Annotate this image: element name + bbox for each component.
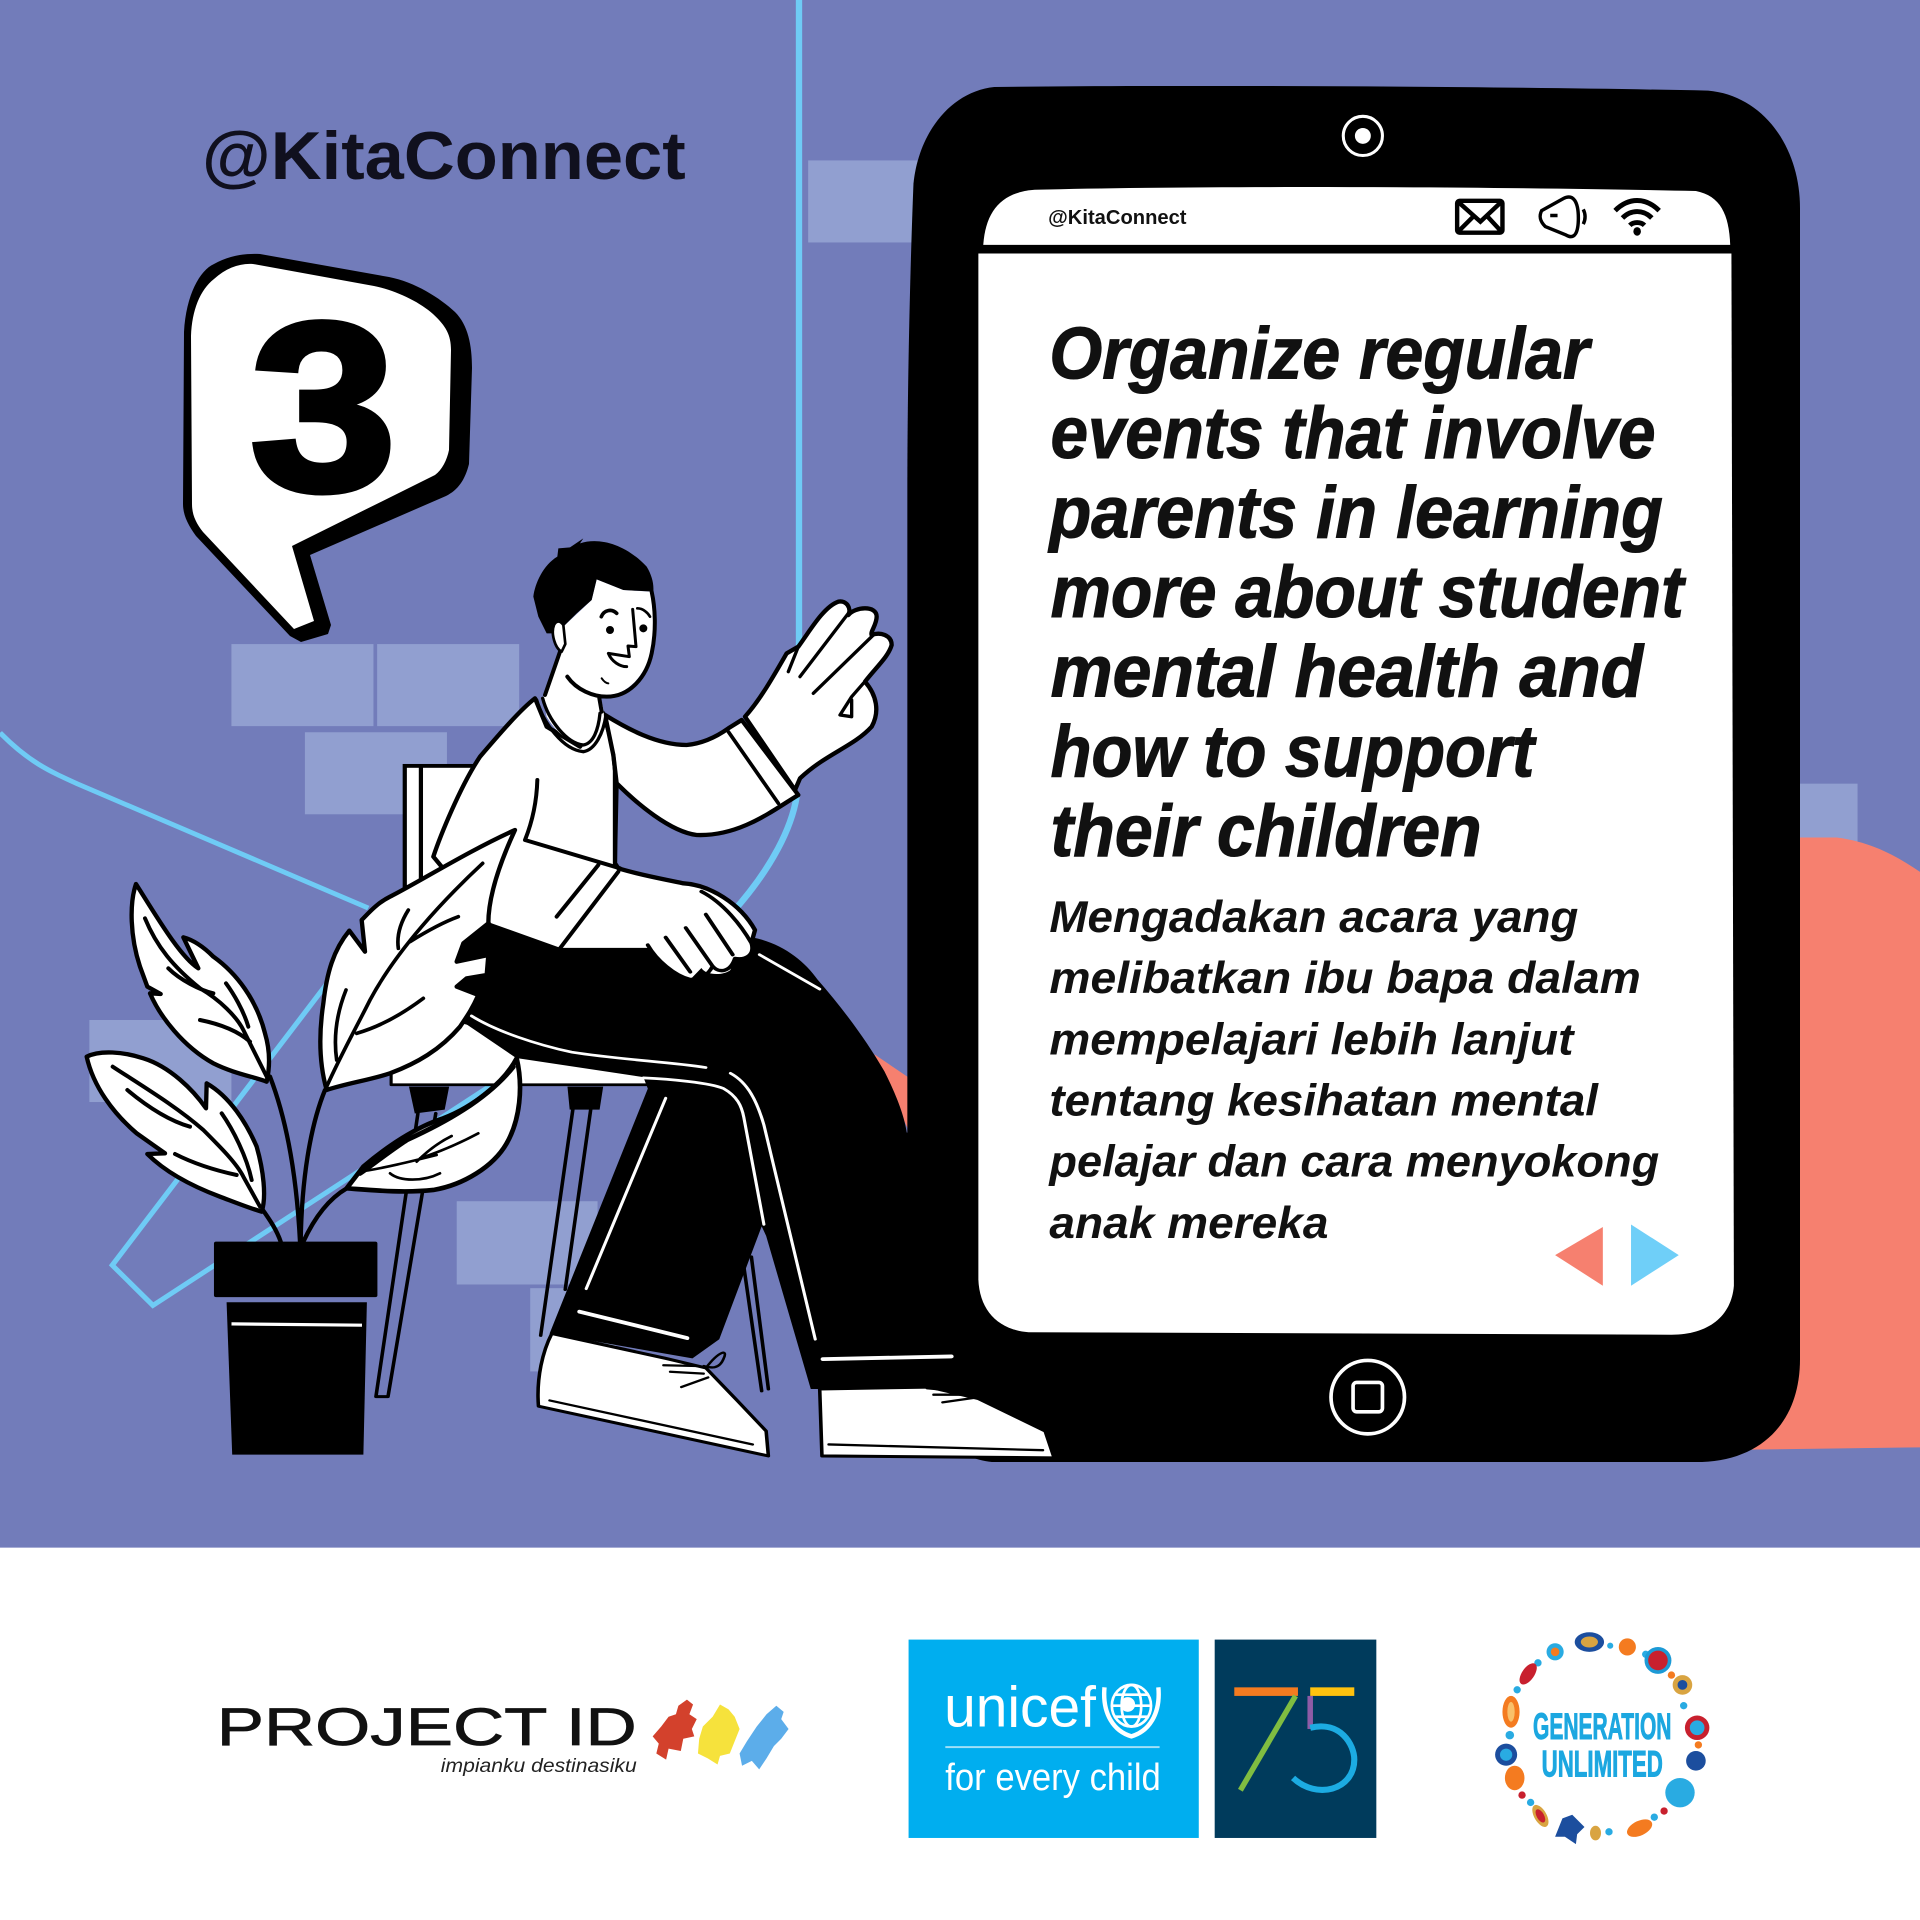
red brush stroke (653, 1700, 697, 1760)
chair seat (391, 1018, 657, 1085)
sweater collar (537, 698, 606, 752)
Unlimited wordmark: UNLIMITED (1542, 1744, 1663, 1785)
yellow brush stroke (698, 1704, 740, 1764)
icon: speaker (1540, 197, 1585, 237)
logo: Project ID (217, 1698, 789, 1777)
white footer panel (0, 1548, 1920, 1920)
man's raised arm (605, 715, 798, 835)
light blue line path (0, 733, 491, 1305)
bottom left leaf veins (113, 1067, 260, 1207)
chair feet (409, 1087, 603, 1113)
right leaf veins (360, 1067, 513, 1173)
5 stem (1308, 1696, 1312, 1729)
left shoe details (550, 1353, 753, 1444)
torso and sleeve lines (525, 755, 620, 948)
home button (1331, 1360, 1404, 1434)
7 stroke (1240, 1696, 1296, 1790)
text block: Malay translation (1048, 893, 1659, 1248)
heading: English message (1048, 311, 1686, 872)
arrow: next (1631, 1224, 1679, 1286)
large centre leaf (320, 830, 515, 1090)
bubble shadow (183, 254, 472, 642)
heading: English message: their children (1051, 789, 1482, 872)
heading: English message: how to support (1051, 709, 1537, 792)
illustration: chair back (405, 766, 482, 887)
tablet screen (978, 253, 1734, 1335)
man's right shoe (820, 1387, 1054, 1458)
logo: Generation Unlimited (1495, 1632, 1709, 1844)
bubble face (191, 264, 451, 629)
75 yellow bar (1310, 1687, 1354, 1696)
UNICEF wordmark: unicef (944, 1676, 1097, 1740)
jaw and neck lines (545, 592, 655, 712)
camera (1343, 116, 1382, 156)
man's hair (533, 538, 653, 633)
text block: Malay translation: pelajar dan cara menyokong (1048, 1138, 1659, 1187)
UNICEF tagline: for every child (945, 1757, 1161, 1799)
text block: Malay translation: anak mereka (1049, 1199, 1329, 1248)
coral blob behind tablet (874, 838, 1920, 1450)
top left leaf (132, 884, 269, 1082)
heading: English message: Organize regular (1049, 311, 1593, 394)
lower hand outline and fingers (648, 892, 752, 980)
tablet body (907, 86, 1800, 1462)
large centre leaf veins (327, 863, 483, 1087)
speech bubble with number (183, 254, 472, 642)
heading: English message: events that involve (1051, 391, 1656, 474)
75 orange bar (1234, 1687, 1298, 1696)
man's sweater torso (433, 698, 755, 960)
illustration: man upper body (433, 538, 892, 960)
tablet device (907, 86, 1800, 1462)
UNICEF rule (945, 1746, 1160, 1748)
vertical light blue line (732, 0, 799, 913)
illustration: man's lower hand (630, 892, 752, 980)
75 navy panel (1215, 1640, 1376, 1838)
text block: Malay translation: tentang kesihatan mental (1049, 1077, 1599, 1126)
right leaf small veins (360, 1133, 478, 1180)
text block: Malay translation: mempelajari lebih lanjut (1049, 1015, 1576, 1064)
text block: Malay translation: melibatkan ibu bapa dalam (1049, 954, 1641, 1003)
Generation wordmark: GENERATION (1533, 1706, 1671, 1747)
illustration: potted plant (87, 830, 520, 1242)
number 3: 3 (250, 273, 397, 541)
5 bowl (1293, 1726, 1354, 1790)
heading: English message: more about student (1051, 550, 1686, 633)
logo: UNICEF 75 (1215, 1640, 1376, 1838)
man's neck and face (543, 579, 655, 745)
plant pot rim (214, 1242, 377, 1297)
hand details (788, 613, 873, 717)
right leaf (347, 1058, 520, 1191)
bottom left leaf (87, 1052, 264, 1212)
background brick pattern (89, 160, 1858, 1371)
raised arm cuff (728, 732, 778, 803)
bead ring (1495, 1632, 1709, 1844)
arrow: previous (1555, 1227, 1603, 1286)
plant pot body (227, 1302, 367, 1455)
icon: wifi (1615, 201, 1659, 235)
pot highlight (231, 1324, 362, 1325)
title handle: @KitaConnect (202, 119, 686, 194)
text block: Malay translation: Mengadakan acara yang (1049, 893, 1578, 942)
chair legs (376, 1110, 768, 1397)
man's raised hand (745, 601, 892, 790)
logo: UNICEF (909, 1640, 1199, 1838)
plant stems (262, 1077, 347, 1242)
blue brush stroke (740, 1706, 789, 1769)
heading: English message: mental health and (1051, 630, 1645, 713)
status bar handle: @KitaConnect (1048, 207, 1187, 229)
man's facial features (601, 608, 650, 683)
top left leaf veins (145, 918, 267, 1077)
man's ear (553, 621, 565, 652)
illustration: man lower body and chair seat (376, 924, 1054, 1458)
UNICEF emblem (1104, 1685, 1159, 1736)
trouser stripes (471, 955, 951, 1359)
man's left shoe (538, 1333, 768, 1456)
heading: English message: parents in learning (1048, 471, 1663, 554)
tablet status bar (983, 187, 1730, 245)
Project ID tagline: impianku destinasiku (441, 1756, 637, 1777)
right shoe details (829, 1388, 1043, 1450)
UNICEF blue panel (909, 1640, 1199, 1838)
Project ID wordmark: PROJECT ID (217, 1698, 637, 1757)
plant pot (214, 1242, 377, 1455)
man's trousers (456, 924, 1005, 1389)
icon: mail (1457, 201, 1502, 233)
